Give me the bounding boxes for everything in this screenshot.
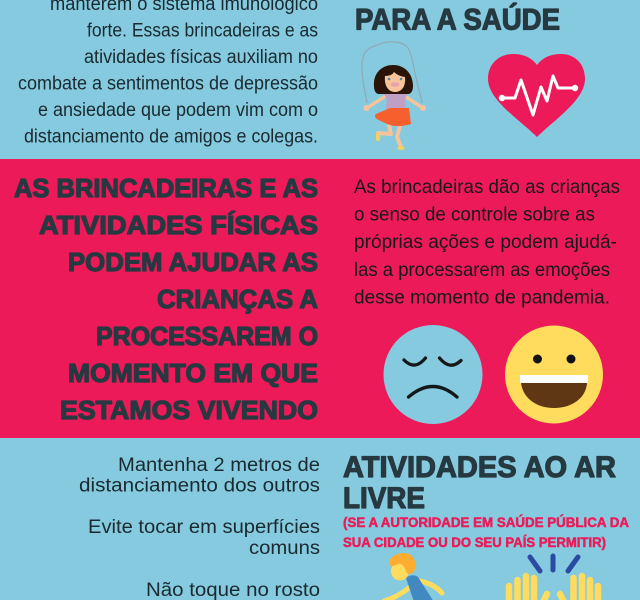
heading: brincadeiras ajudam a processar o momento: PROCESSAREM O	[96, 321, 318, 351]
heading: atividades ao ar livre: LIVRE	[343, 482, 425, 515]
icon: running child	[384, 553, 442, 600]
text block: senso de controle: las a processarem as emoções	[354, 259, 610, 281]
text block: cuidados ao ar livre: Mantenha 2 metros de	[118, 455, 320, 476]
heading: brincadeiras ajudam a processar o momento: AS BRINCADEIRAS E AS	[14, 173, 318, 203]
panel: pink middle band	[0, 159, 640, 438]
text block: senso de controle: próprias ações e podem ajudá-	[354, 231, 617, 253]
text block: senso de controle: o senso de controle sobre as	[354, 204, 595, 226]
icon: laughing face	[505, 326, 603, 424]
text block: senso de controle: desse momento de pandemia.	[354, 286, 610, 308]
text block: cuidados ao ar livre: distanciamento dos outros	[79, 476, 320, 496]
text block: cuidados ao ar livre	[79, 455, 320, 600]
heading: para a saúde: PARA A SAÚDE	[355, 2, 560, 36]
heading: brincadeiras ajudam a processar o momento: PODEM AJUDAR AS	[68, 247, 318, 277]
text block: senso de controle: As brincadeiras dão as crianças	[354, 176, 620, 198]
text block: health benefits paragraph: atividades físicas auxiliam no	[84, 47, 318, 68]
text block: health benefits paragraph: distanciamento de amigos e colegas.	[24, 126, 318, 148]
subheading: se a autoridade permitir: (SE A AUTORIDADE EM SAÚDE PÚBLICA DA	[343, 515, 629, 530]
heading: brincadeiras ajudam a processar o momento: CRIANÇAS A	[157, 284, 318, 314]
heading: brincadeiras ajudam a processar o momento: MOMENTO EM QUE	[68, 358, 318, 388]
heading: atividades ao ar livre	[343, 451, 616, 515]
text block: cuidados ao ar livre: Evite tocar em superfícies	[88, 517, 320, 538]
subheading: se a autoridade permitir	[343, 515, 629, 550]
subheading: se a autoridade permitir: SUA CIDADE OU DO SEU PAÍS PERMITIR)	[343, 535, 606, 550]
text block: senso de controle	[354, 176, 620, 308]
heading: brincadeiras ajudam a processar o momento: ATIVIDADES FÍSICAS	[39, 210, 318, 240]
icon: heart with pulse line	[488, 54, 585, 137]
text block: health benefits paragraph: e ansiedade que podem vim com o	[38, 100, 318, 121]
text block: health benefits paragraph: combate a sentimentos de depressão	[18, 74, 318, 94]
heading: atividades ao ar livre: ATIVIDADES AO AR	[343, 451, 616, 484]
icon: sad face	[384, 325, 482, 424]
heading: brincadeiras ajudam a processar o momento: ESTAMOS VIVENDO	[60, 395, 318, 425]
text block: health benefits paragraph: forte. Essas brincadeiras e as	[87, 20, 318, 42]
text block: health benefits paragraph	[18, 0, 318, 148]
icon: girl jumping rope	[362, 42, 426, 150]
icon: high five hands	[509, 556, 598, 600]
heading: brincadeiras ajudam a processar o momento	[14, 173, 318, 425]
text block: cuidados ao ar livre: comuns	[249, 538, 320, 559]
